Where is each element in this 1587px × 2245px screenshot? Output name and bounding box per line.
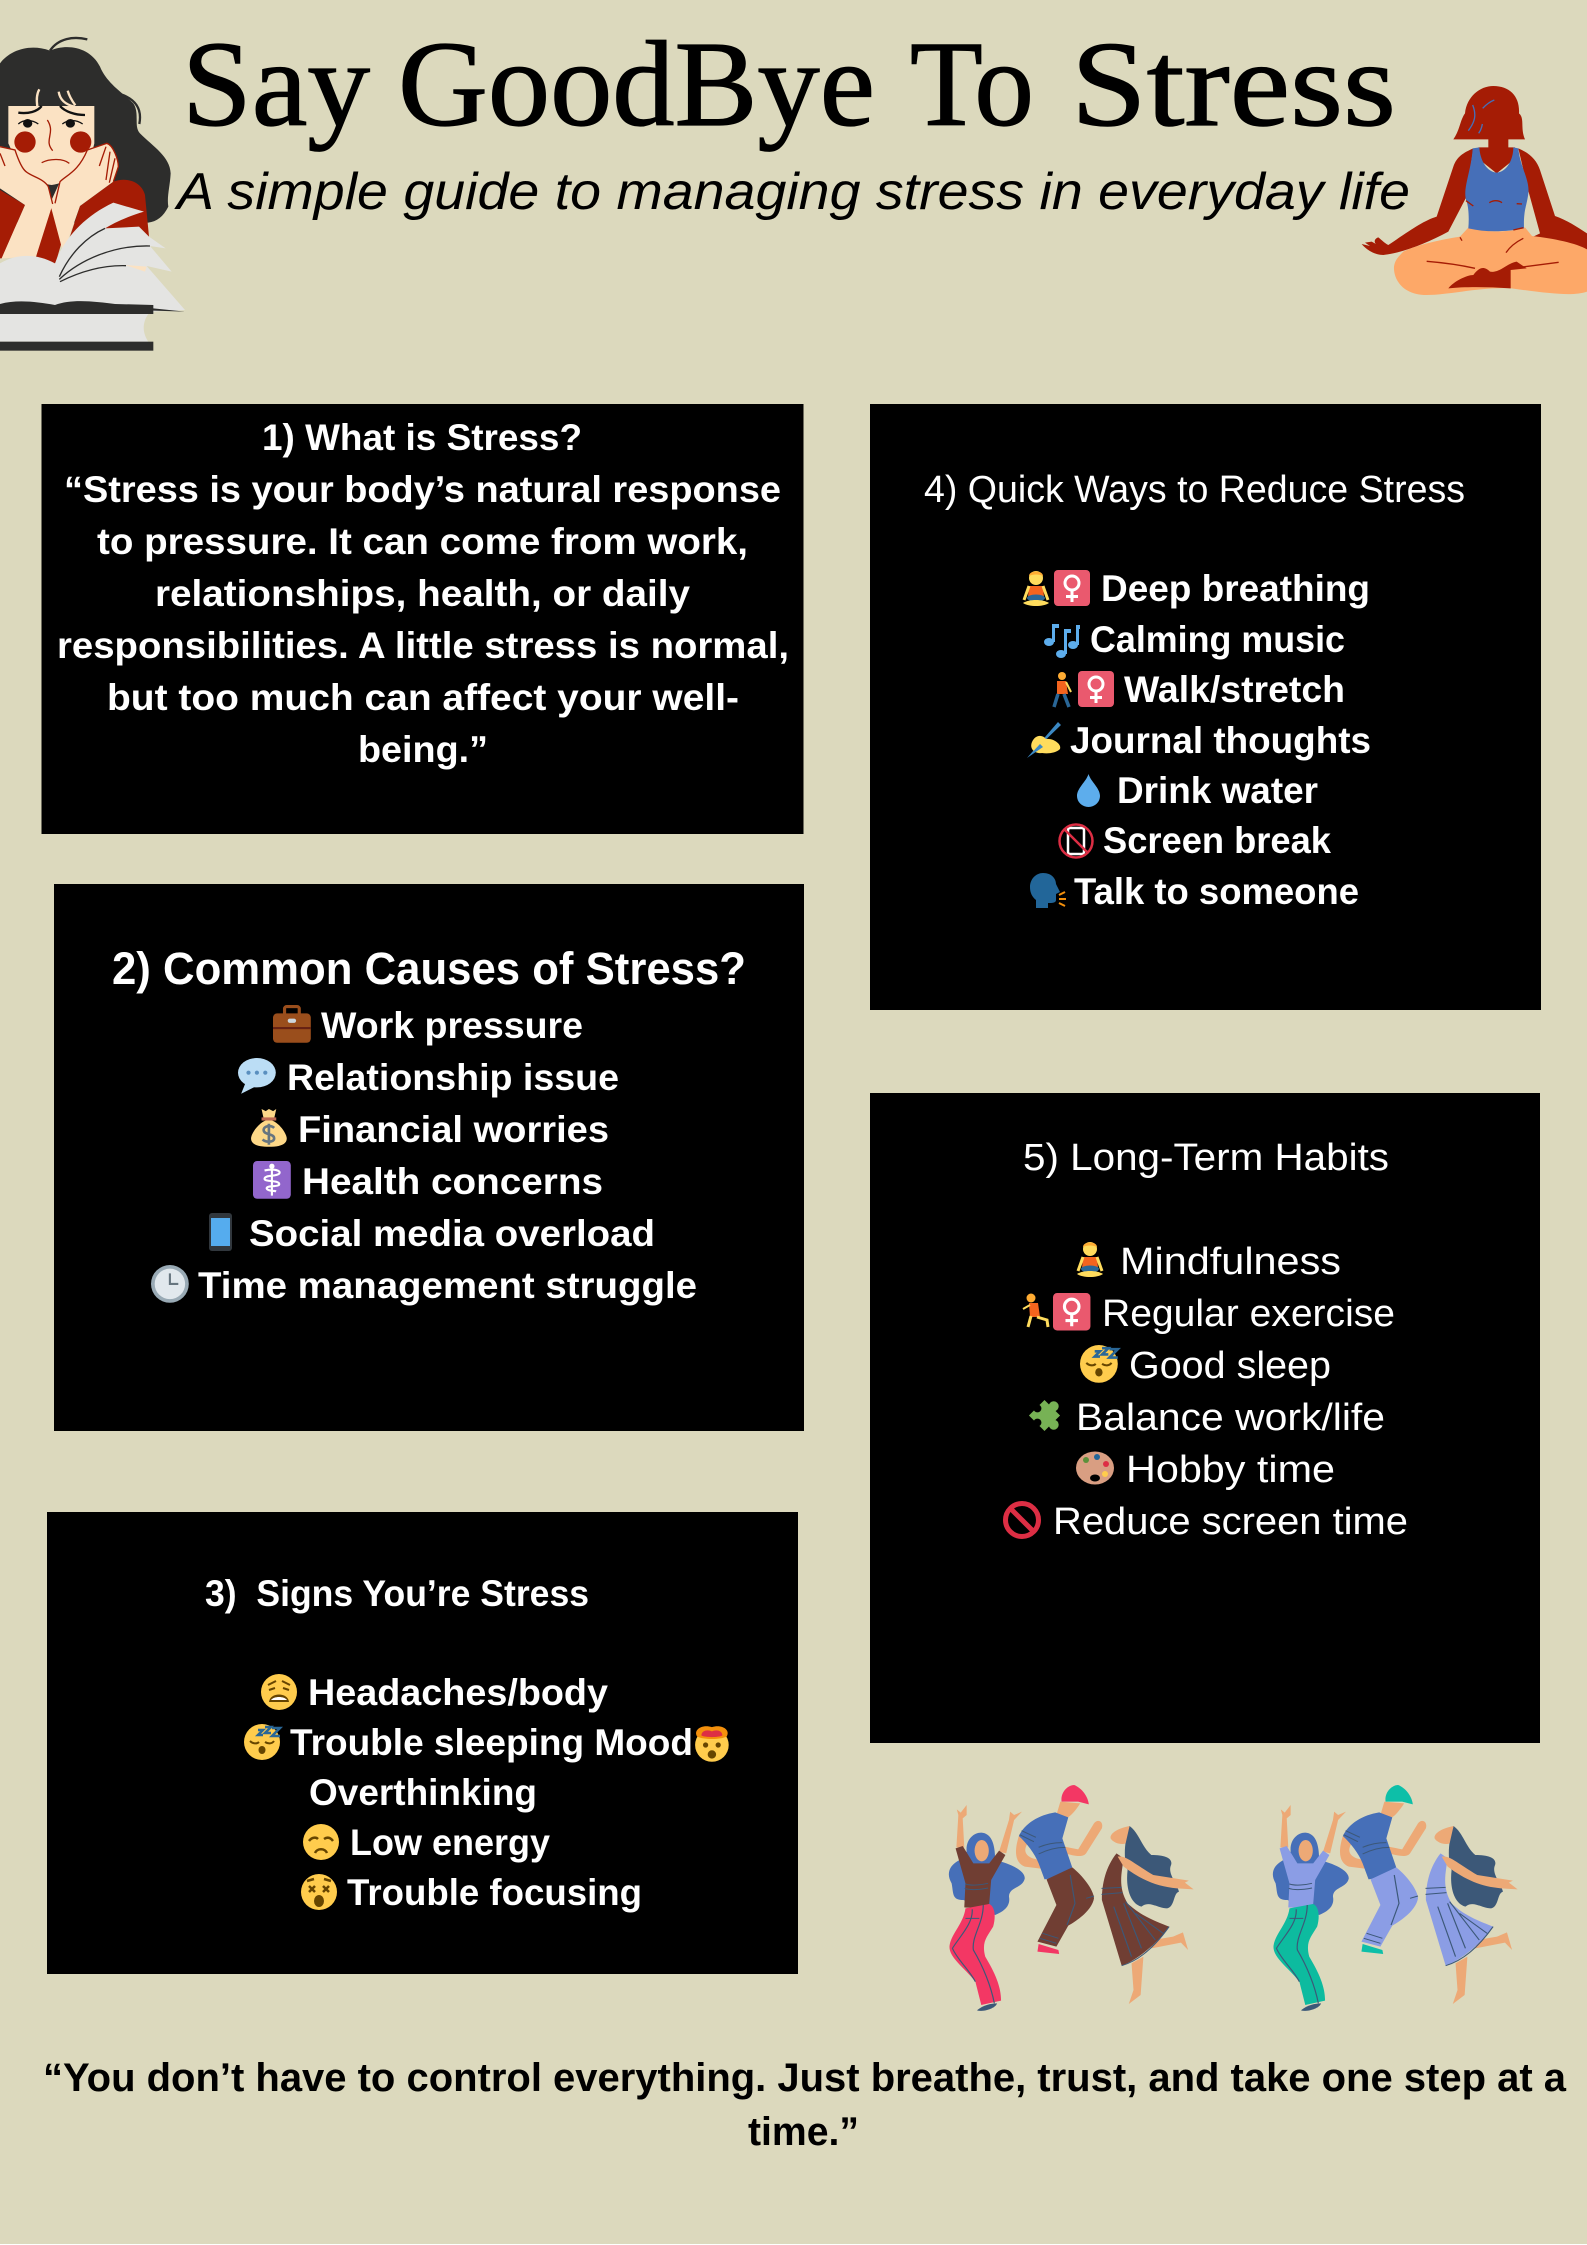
heading: quick ways: 4) Quick Ways to Reduce Stress <box>924 469 1465 511</box>
title: To <box>910 17 1034 152</box>
title: Stress <box>1071 17 1396 152</box>
list item: headaches: Headaches/body <box>308 1672 608 1713</box>
list item: time management struggle: Time management struggle <box>198 1265 697 1306</box>
list item: reduce screen time: Reduce screen time <box>1053 1501 1408 1543</box>
list item: work pressure: Work pressure <box>321 1005 583 1046</box>
panel: long-term habits <box>870 1093 1540 1743</box>
list item: talk to someone: Talk to someone <box>1074 871 1359 912</box>
heading: long-term habits: 5) Long-Term Habits <box>1023 1137 1389 1179</box>
text block: stress definition: but too much can affect your well- <box>107 677 739 718</box>
panel: quick ways to reduce stress <box>870 404 1541 1010</box>
list item: calming music: Calming music <box>1090 619 1345 660</box>
list item: balance work/life: Balance work/life <box>1076 1397 1385 1439</box>
closing quote: “You don’t have to control everything. Just breathe, trust, and take one step at a <box>43 2056 1567 2100</box>
list item: hobby time: Hobby time <box>1126 1449 1335 1491</box>
list item: relationship issue: Relationship issue <box>287 1057 619 1098</box>
panel: what is stress <box>42 404 804 834</box>
panel: common causes of stress <box>54 884 804 1431</box>
panel: signs you're stressed <box>47 1512 798 1974</box>
text block: stress definition: responsibilities. A little stress is normal, <box>57 625 789 666</box>
list item: good sleep: Good sleep <box>1129 1345 1331 1387</box>
list item: health concerns: Health concerns <box>302 1161 603 1202</box>
list item: financial worries: Financial worries <box>298 1109 609 1150</box>
list item: journal thoughts: Journal thoughts <box>1070 720 1371 761</box>
list item: trouble focusing: Trouble focusing <box>347 1872 642 1913</box>
illustration: three dancers (periwinkle and teal) <box>1273 1785 1518 2011</box>
title: GoodBye <box>398 17 875 152</box>
closing quote <box>43 2056 1567 2154</box>
list item: trouble sleeping, mood: Trouble sleeping Mood <box>290 1722 693 1763</box>
list item: deep breathing: Deep breathing <box>1101 568 1370 609</box>
illustration: stressed woman reading book <box>0 38 185 351</box>
list item: social media overload: Social media overload <box>249 1213 655 1254</box>
subtitle: A simple guide to managing stress in everyday life <box>174 163 1410 221</box>
text block: stress definition: “Stress is your body’s natural response <box>64 469 781 510</box>
list item: walk/stretch: Walk/stretch <box>1124 669 1345 710</box>
text block: stress definition: relationships, health, or daily <box>155 573 690 614</box>
text block: stress definition <box>57 469 789 770</box>
heading: what is stress: 1) What is Stress? <box>262 417 582 458</box>
closing quote: time.” <box>748 2110 859 2154</box>
title: Say <box>182 17 370 152</box>
heading: common causes: 2) Common Causes of Stress? <box>112 943 746 994</box>
list item: screen break: Screen break <box>1103 820 1331 861</box>
title <box>182 17 1396 152</box>
illustration: meditating woman <box>1362 86 1587 295</box>
text block: stress definition: being.” <box>358 729 488 770</box>
text block: stress definition: to pressure. It can come from work, <box>97 521 748 562</box>
list item: drink water: Drink water <box>1117 770 1318 811</box>
illustration: three dancers (brown and pink) <box>949 1785 1194 2011</box>
list item: low energy: Low energy <box>350 1822 550 1863</box>
list item: overthinking: Overthinking <box>309 1772 537 1813</box>
list item: regular exercise: Regular exercise <box>1102 1293 1395 1335</box>
heading: signs: 3) Signs You’re Stress <box>205 1573 589 1614</box>
list item: mindfulness: Mindfulness <box>1120 1241 1341 1283</box>
